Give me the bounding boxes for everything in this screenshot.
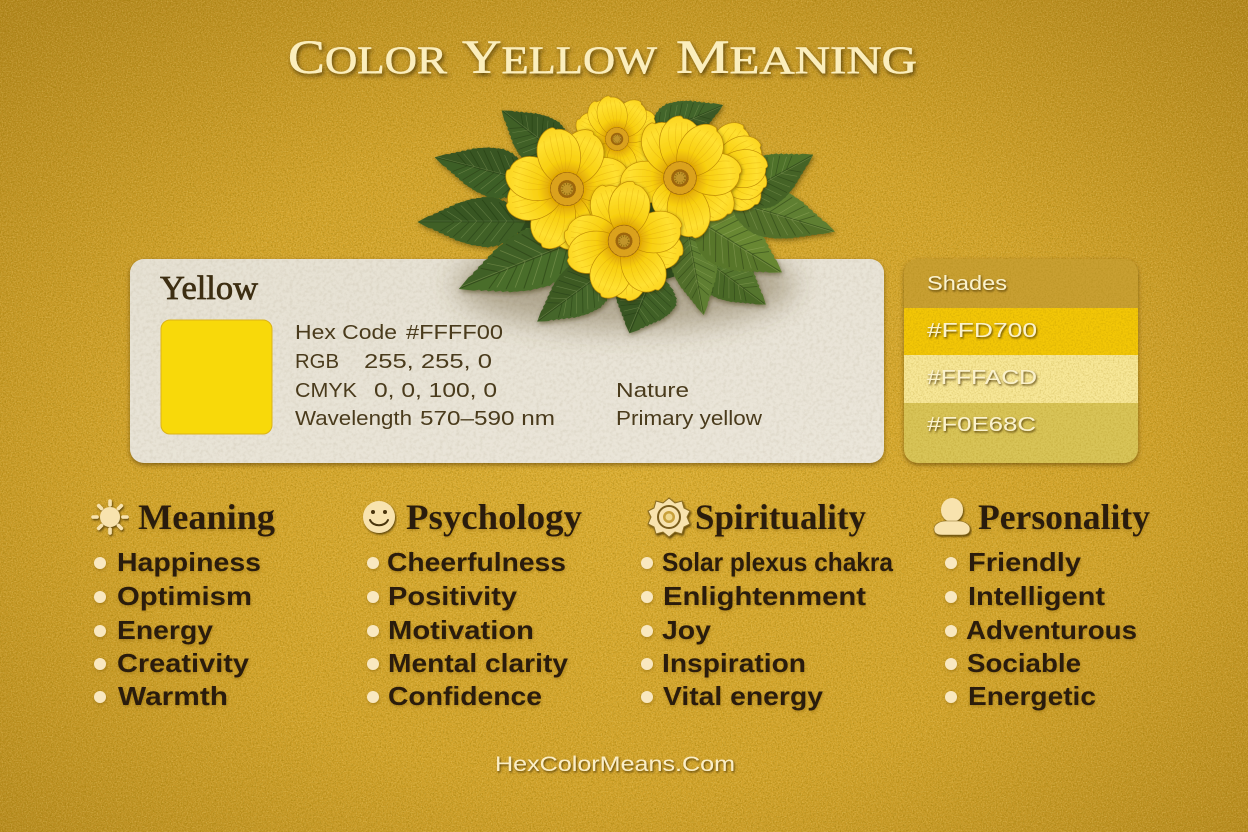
shade band: khaki: [904, 403, 1138, 463]
list: spirituality: [641, 547, 894, 711]
heading: meaning: Meaning: [138, 497, 275, 537]
flower front: [561, 178, 687, 304]
list: psychology: Cheerfulness: [387, 547, 566, 577]
shade band: lemon chiffon: [904, 355, 1138, 403]
list: spirituality: Solar plexus chakra: [662, 547, 894, 577]
flower right: [616, 113, 744, 243]
color codes: Hex Code: [295, 322, 397, 344]
shade labels: [927, 273, 1037, 436]
color codes: 255, 255, 0: [364, 351, 492, 373]
flower back left: [571, 93, 662, 185]
list: meaning: Creativity: [117, 648, 250, 678]
footer: website: HexColorMeans.Com: [495, 753, 735, 776]
list: meaning: [94, 547, 261, 711]
color codes: CMYK: [295, 380, 358, 402]
list: spirituality: Inspiration: [662, 648, 806, 678]
list: meaning: Happiness: [117, 547, 261, 577]
column: spirituality: [641, 497, 894, 711]
nature note: [616, 380, 763, 430]
list: meaning: Optimism: [117, 581, 252, 611]
list: personality: Intelligent: [968, 581, 1105, 611]
color codes: #FFFF00: [406, 322, 503, 344]
color codes: 570–590 nm: [420, 408, 555, 430]
color codes: 0, 0, 100, 0: [374, 380, 497, 402]
shade labels: Shades: [927, 273, 1007, 295]
color codes: [295, 322, 555, 430]
heading: personality: Personality: [978, 497, 1150, 537]
list: spirituality: Enlightenment: [663, 581, 866, 611]
list: personality: Energetic: [968, 681, 1096, 711]
shade labels: #F0E68C: [927, 414, 1036, 436]
title: COLOR: [288, 31, 447, 84]
list: meaning: Energy: [117, 615, 214, 645]
column: meaning: [93, 497, 275, 711]
nature note: Primary yellow: [616, 408, 763, 430]
color codes: Wavelength: [295, 408, 412, 430]
flower back right: [696, 115, 771, 220]
shade band: gold: [904, 308, 1138, 355]
list: psychology: Motivation: [388, 615, 534, 645]
list: psychology: Mental clarity: [388, 648, 569, 678]
list: personality: Adventurous: [966, 615, 1137, 645]
shade labels: #FFD700: [927, 320, 1037, 342]
title: M EANING: [676, 31, 917, 84]
title: [288, 31, 917, 84]
list: psychology: Positivity: [388, 581, 518, 611]
icon: sun: [93, 501, 127, 533]
nature note: Nature: [616, 380, 689, 402]
color codes: RGB: [295, 351, 339, 373]
card heading: Yellow: [160, 270, 258, 307]
column: personality: [934, 497, 1150, 711]
icon: chakra: [648, 498, 690, 537]
icon: person: [934, 498, 970, 535]
list: personality: [945, 547, 1137, 711]
list: spirituality: Vital energy: [663, 681, 824, 711]
list: meaning: Warmth: [118, 681, 228, 711]
column: psychology: [363, 497, 582, 711]
shade labels: #FFFACD: [927, 367, 1037, 389]
list: spirituality: Joy: [662, 615, 712, 645]
list: personality: Sociable: [967, 648, 1081, 678]
title: YELLOW: [462, 31, 657, 84]
flower left: [500, 123, 633, 256]
list: personality: Friendly: [968, 547, 1082, 577]
list: psychology: [367, 547, 569, 711]
illustration: yellow flowers and leaves: [418, 84, 842, 345]
icon: smiley: [363, 501, 395, 533]
list: psychology: Confidence: [388, 681, 542, 711]
color swatch: [161, 320, 272, 434]
heading: spirituality: Spirituality: [695, 497, 866, 537]
panel: shades: [904, 259, 1138, 463]
panel: color card: [130, 240, 884, 463]
heading: psychology: Psychology: [406, 497, 582, 537]
